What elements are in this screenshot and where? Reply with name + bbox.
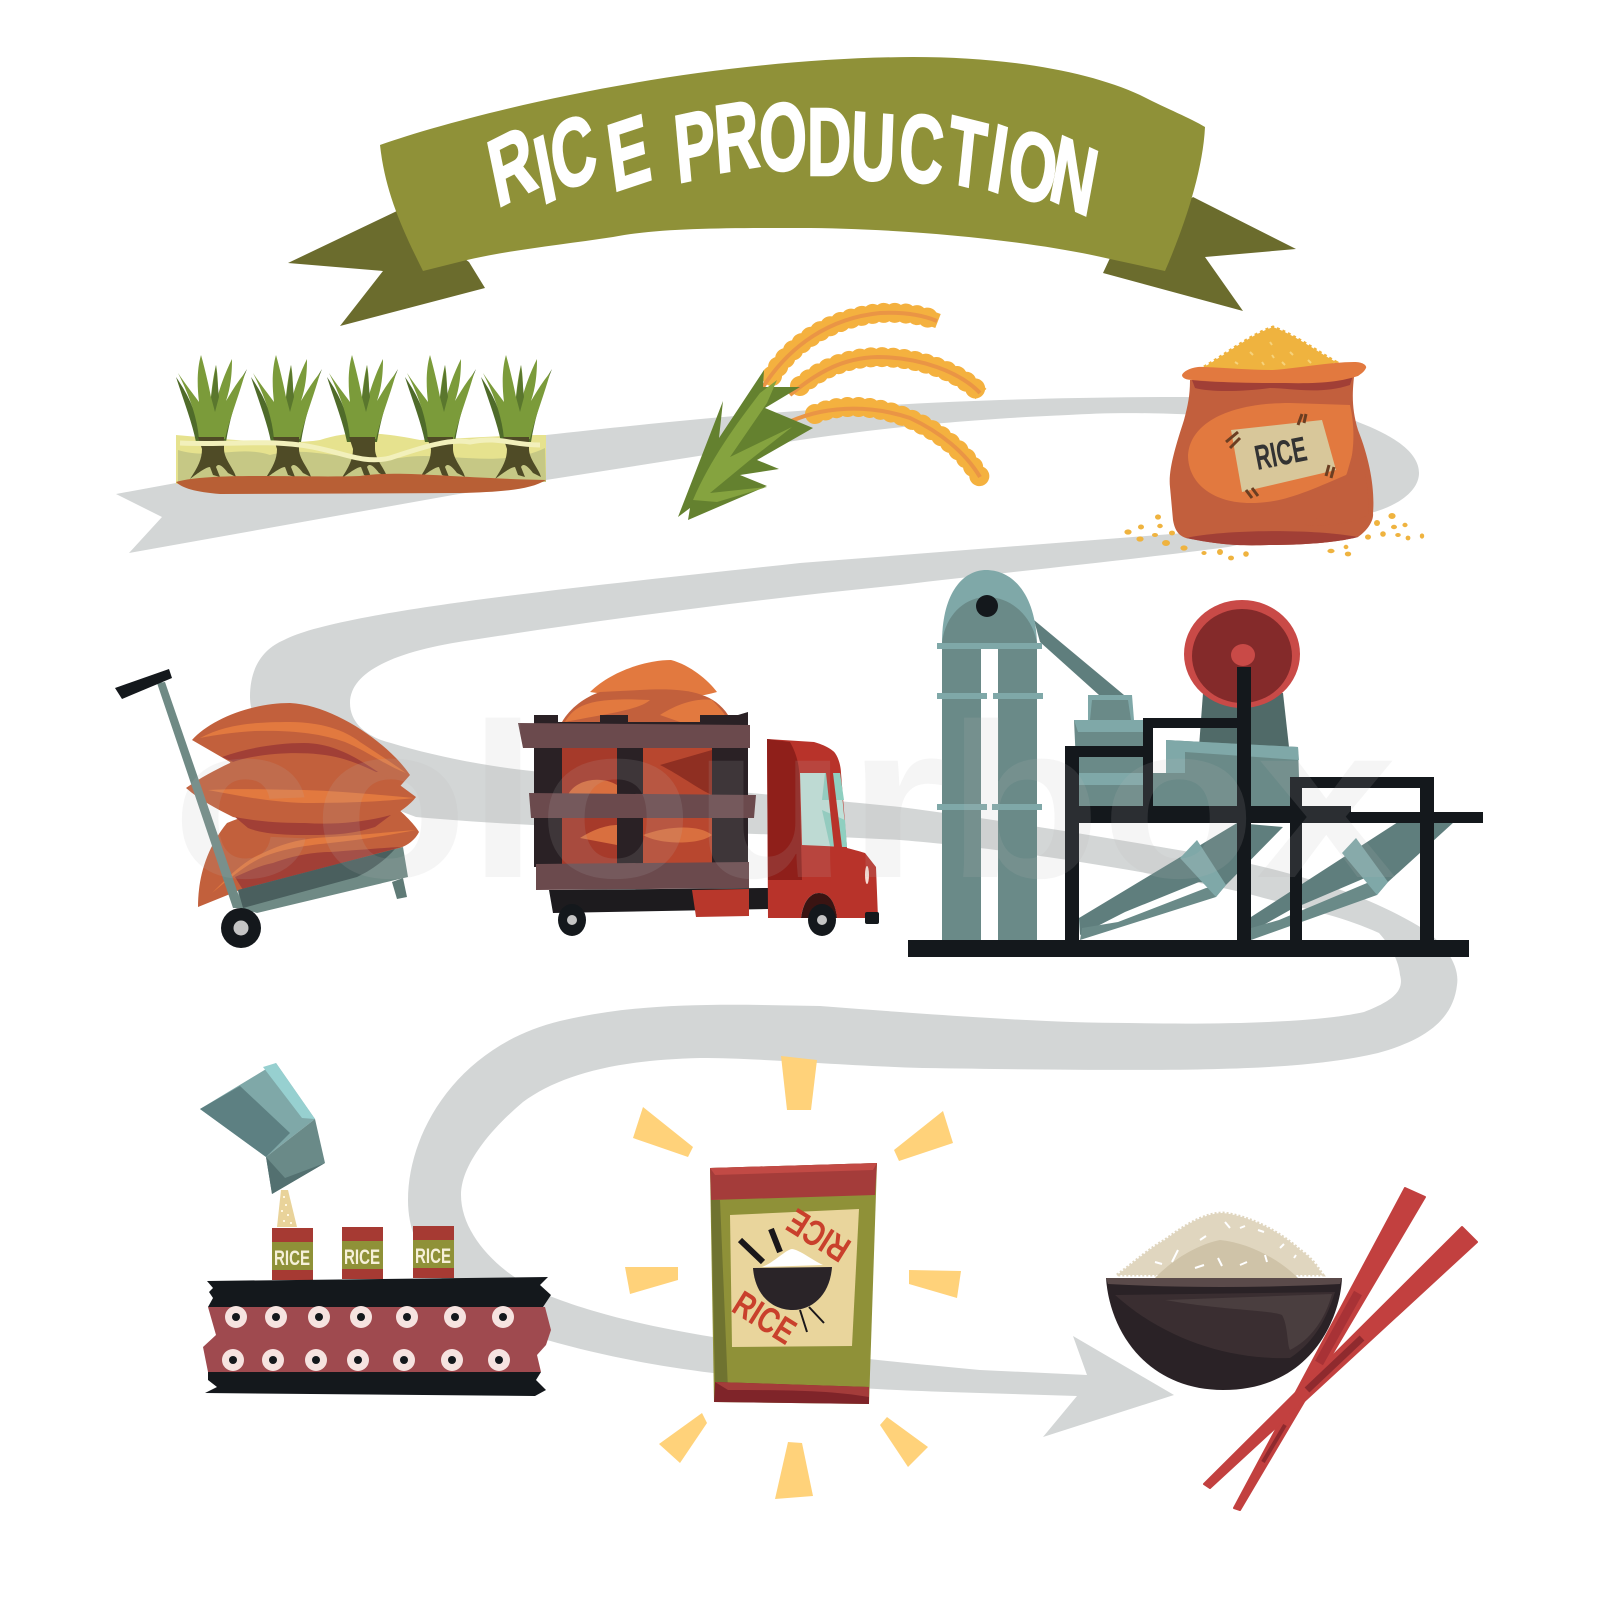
step 3: sack of rice: [1124, 327, 1424, 560]
seedling 1: [176, 355, 247, 479]
top sack shadow: [222, 743, 378, 772]
elevator dome: [942, 570, 1037, 643]
middle sack highlight: [208, 789, 414, 803]
label text lower: RICE: [726, 1283, 803, 1352]
grain pile: [1204, 327, 1336, 380]
package label: [730, 1209, 859, 1347]
spilled grains: [1124, 513, 1424, 560]
label rice mound: [762, 1249, 823, 1267]
middle sack: [186, 753, 416, 824]
step 6: milling machine: [908, 570, 1483, 957]
crate bottom slat: [536, 862, 749, 890]
packet 3: RICE: [415, 1245, 451, 1268]
label bowl: [753, 1267, 832, 1310]
seedling 4: [405, 355, 476, 479]
red fuel box: [692, 889, 749, 917]
conveyor belt top: [207, 1277, 551, 1307]
cart tray shadow: [238, 849, 395, 908]
cart tray: [238, 847, 408, 913]
packet 2: RICE: [344, 1246, 380, 1269]
bowl: [1106, 1278, 1342, 1390]
sieve 1 upper: [1079, 823, 1283, 935]
sack text: RICE: [1252, 430, 1310, 478]
headlight: [865, 866, 869, 884]
front wheel: [808, 904, 836, 936]
cart wheel: [221, 908, 261, 948]
paddy lower water: [178, 448, 546, 484]
falling rice: [277, 1190, 297, 1227]
crate top slat: [518, 723, 750, 748]
sieve 2 upper: [1251, 822, 1454, 932]
sieve 2 bracket: [1342, 838, 1388, 895]
cooked rice: [1117, 1213, 1323, 1275]
package bottom band: [714, 1382, 869, 1404]
hopper: [1088, 695, 1134, 720]
cart pole: [157, 682, 243, 908]
pulley stand: [1199, 693, 1289, 747]
panicle 2: [790, 357, 981, 395]
label stitches: [1226, 414, 1334, 498]
packet 1: [272, 1228, 313, 1280]
bottom sack: [198, 803, 419, 907]
elevator hole: [976, 595, 998, 617]
rice grains: [1155, 1222, 1296, 1268]
chassis: [549, 888, 768, 913]
step 5: truck with sacks: [518, 660, 879, 936]
sack label: [1231, 420, 1336, 492]
middle sack shadow: [235, 815, 391, 835]
elevator bands: [937, 643, 1043, 810]
pile grain highlights: [1235, 342, 1311, 365]
truck cab: [767, 739, 878, 918]
banner right tail: [1103, 197, 1296, 311]
sieve 1 bracket: [1180, 840, 1226, 897]
cab window: [800, 773, 847, 847]
banner body: [380, 57, 1205, 271]
bumper: [865, 912, 879, 924]
conveyor belt bottom: [205, 1372, 546, 1396]
mill block: [1153, 740, 1300, 807]
bottom sack highlight: [212, 830, 416, 893]
banner left tail: [288, 210, 485, 326]
pulley wheel: [1184, 600, 1300, 708]
elevator columns: [942, 643, 1037, 940]
step 2: ripe rice plant: [678, 313, 981, 520]
sack swirl highlight: [1188, 403, 1353, 503]
elevator arm: [1034, 620, 1124, 695]
seedling 2: [251, 355, 322, 479]
watermark: colourbox: [172, 678, 1397, 924]
crate middle slat: [529, 793, 756, 818]
leaves dark: [678, 370, 813, 520]
label text upper: RICE: [780, 1201, 857, 1270]
shine rays: [625, 1056, 961, 1499]
panicle 1: [763, 313, 938, 387]
seedling 3: [327, 355, 398, 479]
rear wheel: [558, 904, 586, 936]
chopstick 1: [1234, 1188, 1425, 1510]
hopper block: [1074, 720, 1145, 807]
conveyor rollers: [222, 1306, 514, 1371]
packet 1: RICE: [274, 1247, 310, 1270]
package body: [710, 1163, 877, 1404]
top sack: [192, 703, 410, 792]
paddy water: [176, 433, 546, 484]
chopstick lower shading: [1263, 1425, 1285, 1462]
top sack highlight: [200, 722, 406, 773]
step 8: retail rice package: [625, 1056, 961, 1499]
soil: [176, 474, 546, 494]
process path ribbon with arrow: [116, 397, 1457, 1437]
cart handle: [115, 669, 172, 699]
seedling 5: [481, 355, 552, 479]
step 4: hand cart with sacks: [115, 669, 419, 948]
second load sack: [562, 689, 730, 730]
wheel arch: [801, 893, 837, 918]
bottom sack shadow: [235, 847, 401, 890]
step 9: bowl of cooked rice with chopsticks: [1106, 1188, 1477, 1510]
packet 2: [342, 1227, 383, 1279]
conveyor belt middle: [203, 1307, 551, 1372]
package top band: [710, 1163, 877, 1200]
sack bottom shadow: [1186, 531, 1358, 545]
chopstick shading: [1319, 1293, 1358, 1363]
crate back: [534, 712, 748, 867]
cart leg: [392, 878, 407, 899]
panicle 3: [753, 407, 981, 479]
pouring hopper: [200, 1063, 325, 1194]
load seen through crate: [562, 748, 712, 864]
chopstick 2: [1204, 1227, 1477, 1488]
water wave: [180, 440, 540, 460]
sieve 1 lower: [1080, 885, 1226, 940]
title text: RICE PRODUCTION: [480, 80, 1105, 238]
label chopsticks: [740, 1229, 780, 1262]
package side fold: [711, 1200, 728, 1390]
sack body: [1170, 377, 1373, 545]
step 7: packing conveyor: [200, 1063, 551, 1396]
machine frame: [908, 667, 1483, 957]
sack rim: [1182, 362, 1366, 383]
leaves light: [693, 380, 792, 502]
step 1: seedlings in paddy field: [176, 355, 552, 494]
top load sack: [590, 660, 717, 698]
chopstick overlap shading: [1307, 1338, 1362, 1390]
packet 3: [413, 1226, 454, 1278]
sieve 2 lower: [1251, 882, 1388, 940]
title banner: [288, 57, 1296, 326]
sack neck shadow: [1192, 372, 1354, 391]
